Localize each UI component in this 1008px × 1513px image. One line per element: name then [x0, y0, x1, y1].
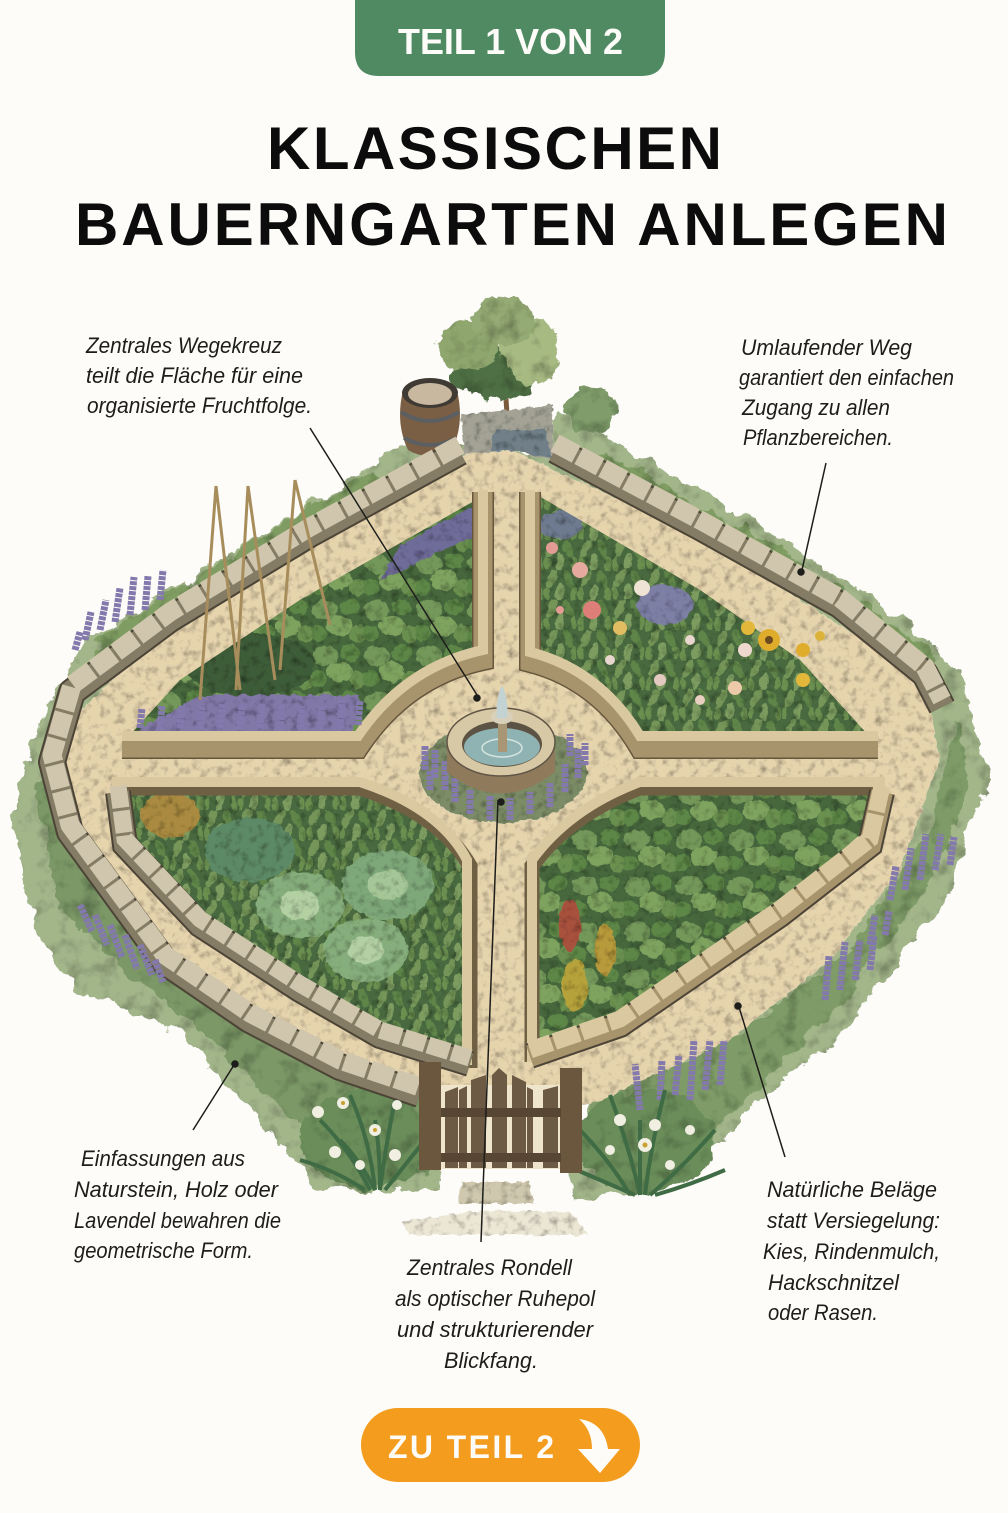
note: natural surfaces — [763, 1177, 940, 1325]
gravel ground — [60, 450, 940, 1105]
note: edgings: Naturstein, Holz oder — [74, 1177, 280, 1202]
note: central roundel: und strukturierender — [397, 1317, 595, 1342]
note: edgings: geometrische Form. — [74, 1238, 253, 1263]
note: surrounding path: Pflanzbereichen. — [743, 425, 893, 450]
note: central roundel: Zentrales Rondell — [406, 1255, 573, 1280]
flower clumps beside gate — [300, 1090, 725, 1195]
icon: curved down arrow — [578, 1419, 620, 1473]
note: central path cross: teilt die Fläche für eine — [86, 363, 303, 388]
rain barrel — [400, 378, 460, 456]
note: edgings — [74, 1146, 281, 1263]
note: natural surfaces: statt Versiegelung: — [767, 1208, 940, 1233]
bed: flowers — [541, 497, 864, 731]
note: surrounding path: Umlaufender Weg — [741, 335, 913, 360]
lavender ring around fountain — [419, 723, 587, 823]
header tab: part 1 of 2: TEIL 1 VON 2 — [398, 21, 623, 62]
stepping stones — [400, 1182, 590, 1235]
title: KLASSISCHEN — [267, 115, 722, 182]
illustration: garden plan — [12, 296, 988, 1235]
note: central roundel: Blickfang. — [444, 1348, 538, 1373]
bed: cabbages — [132, 796, 462, 1047]
note: surrounding path: Zugang zu allen — [741, 395, 890, 420]
note: surrounding path — [739, 335, 954, 450]
note: central path cross: Zentrales Wegekreuz — [85, 333, 282, 358]
outer stone wall — [52, 443, 942, 1094]
button: to part 2 — [361, 1408, 640, 1482]
header tab: part 1 of 2 — [355, 0, 665, 76]
note: central path cross: organisierte Fruchtfolge. — [87, 393, 312, 418]
note: natural surfaces: Natürliche Beläge — [767, 1177, 937, 1202]
note: edgings: Lavendel bewahren die — [74, 1208, 281, 1233]
bed: chard and leafy vegetables — [540, 796, 868, 1038]
leader lines with dots — [193, 428, 826, 1242]
note: edgings: Einfassungen aus — [81, 1146, 245, 1171]
lavender clumps on border — [75, 570, 954, 1110]
bed: climbing beans and squash — [134, 502, 472, 731]
fountain — [447, 685, 555, 794]
outer planting border — [12, 410, 988, 1200]
compost corner enclosure — [462, 405, 554, 462]
note: natural surfaces: Hackschnitzel — [768, 1270, 900, 1295]
title: BAUERNGARTEN ANLEGEN — [75, 191, 948, 258]
note: natural surfaces: Kies, Rindenmulch, — [763, 1239, 940, 1264]
bean trellis poles — [200, 480, 330, 700]
note: natural surfaces: oder Rasen. — [768, 1300, 878, 1325]
note: central path cross — [85, 333, 312, 418]
tree — [440, 296, 616, 434]
note: central roundel — [395, 1255, 596, 1373]
button: to part 2: ZU TEIL 2 — [388, 1429, 554, 1465]
wooden gate — [419, 1062, 582, 1173]
note: central roundel: als optischer Ruhepol — [395, 1286, 596, 1311]
inner bed walls — [112, 490, 885, 1068]
gravel cross paths — [490, 470, 526, 1085]
note: surrounding path: garantiert den einfachen — [739, 365, 954, 390]
title — [75, 115, 948, 258]
